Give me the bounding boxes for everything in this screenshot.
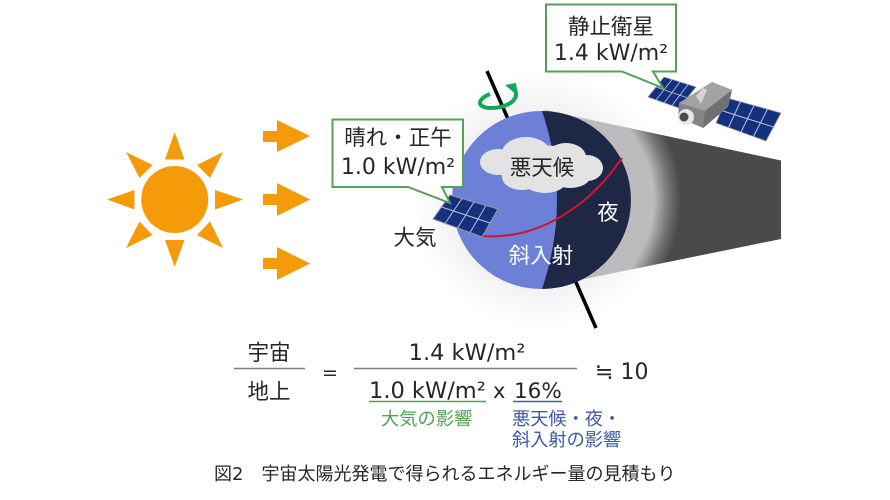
right fraction: 1.0 kW/m² (369, 378, 486, 404)
callout: clear noon: 晴れ・正午 (344, 126, 452, 151)
label: bad weather: 悪天候 (510, 156, 574, 181)
sun path line (483, 158, 622, 236)
green underline (369, 400, 486, 402)
day side (452, 111, 630, 289)
ground solar panel (433, 195, 498, 237)
right fraction: x (493, 379, 505, 403)
callout: geostationary satellite: 1.4 kW/m² (554, 41, 668, 66)
rotation arrow (480, 83, 518, 108)
callout: clear noon (332, 120, 463, 203)
approximate result: ≒ 10 (595, 360, 648, 385)
label: night: 夜 (597, 201, 619, 226)
arrow: sunlight middle (263, 183, 310, 216)
earth shadow (545, 110, 781, 284)
satellite (648, 77, 781, 141)
note: weather night incidence effect: 斜入射の影響 (512, 430, 621, 451)
cloud (480, 137, 603, 193)
sun icon (107, 132, 243, 267)
arrow: sunlight top (263, 120, 310, 152)
note: weather night incidence effect (512, 409, 621, 451)
label: atmosphere: 大気 (393, 226, 437, 251)
left fraction (234, 341, 305, 405)
formula (234, 340, 648, 405)
callout: geostationary satellite: 静止衛星 (568, 15, 654, 40)
left solar panel (648, 77, 696, 108)
earth globe (452, 111, 631, 289)
body (678, 82, 732, 128)
atmosphere glow (411, 70, 671, 330)
note: atmosphere effect: 大気の影響 (381, 409, 472, 430)
right solar panel (716, 98, 781, 141)
left fraction: 宇宙 (247, 341, 291, 366)
label: oblique incidence: 斜入射 (509, 244, 573, 269)
equals sign: = (322, 362, 338, 384)
right fraction: 1.4 kW/m² (409, 340, 525, 366)
callout: geostationary satellite (546, 4, 676, 88)
caption: 図2 宇宙太陽光発電で得られるエネルギー量の見積もり (214, 464, 675, 485)
right fraction: 16% (514, 379, 562, 404)
callout: clear noon: 1.0 kW/m² (341, 155, 455, 180)
rotation axis (487, 71, 596, 328)
note: weather night incidence effect: 悪天候・夜・ (512, 409, 621, 430)
left fraction: 地上 (247, 380, 291, 405)
night side (542, 111, 631, 289)
right fraction (354, 340, 577, 404)
arrow: sunlight bottom (263, 247, 310, 280)
lens (678, 109, 694, 125)
blue underline (513, 400, 562, 402)
